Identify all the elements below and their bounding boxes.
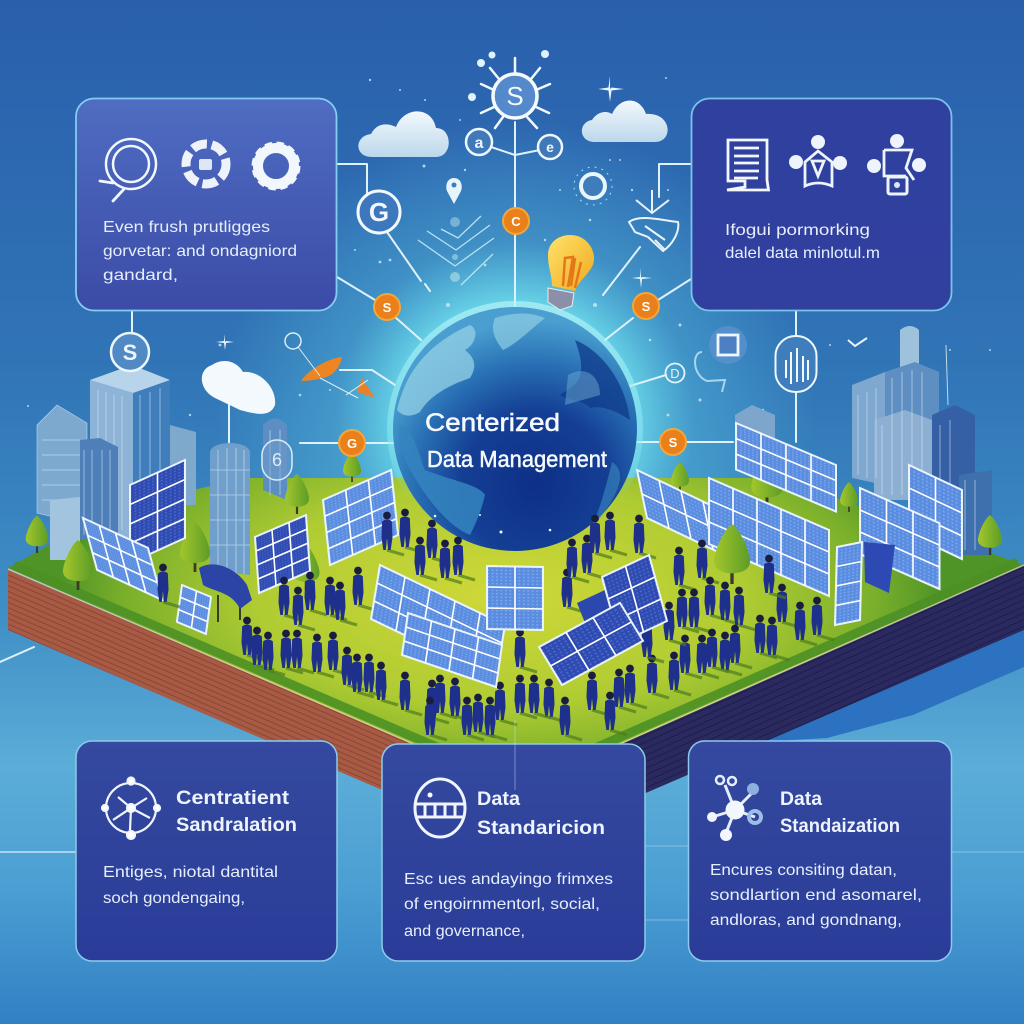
icon: D circle [666, 364, 684, 382]
globe title: Centerized [425, 409, 560, 437]
text: panel body: soch gondengaing, [103, 890, 245, 907]
heading [477, 789, 605, 839]
solar panels: front [371, 524, 750, 687]
land side: brick [8, 570, 518, 848]
heading [176, 788, 297, 836]
text: panel body: and governance, [404, 923, 525, 940]
text: panel body: sondlartion end asomarel, [710, 887, 922, 904]
panel: bottom centre [382, 720, 645, 961]
orange nodes: G [347, 436, 357, 451]
text: panel body: dalel data minlotul.m [725, 245, 880, 262]
icon: location pin and chevrons [418, 178, 494, 285]
text: panel body [725, 222, 880, 262]
icon: glowing ring [574, 167, 612, 205]
heading: Data [477, 789, 520, 810]
text: panel body [103, 219, 297, 284]
text: panel body [710, 862, 922, 929]
globe continents [397, 314, 630, 535]
icon: small eye circle [538, 135, 562, 159]
text: panel body: Ifogui pormorking [725, 222, 870, 239]
icon: sun with S [468, 50, 550, 128]
icon: document [727, 140, 768, 190]
panel: top right [692, 98, 952, 310]
icon: orange kite [285, 333, 375, 398]
buildings right [735, 326, 992, 555]
text: panel body: andloras, and gondnang, [710, 912, 902, 929]
orange nodes: O [700, 263, 710, 278]
heading: Standaricion [477, 818, 605, 839]
globe title: Data Management [427, 446, 608, 472]
icon: cloud centre-left [202, 361, 275, 414]
heading: Centratient [176, 788, 290, 809]
icon: small eye circle: e [546, 139, 554, 155]
orange nodes: S [642, 299, 651, 314]
orange nodes: S [383, 300, 392, 315]
icon: building S badge [111, 333, 149, 371]
orange nodes: S [669, 435, 678, 450]
icon: compass network [102, 778, 160, 839]
text: panel body: Even frush prutligges [103, 219, 270, 236]
icon: small A circle: a [475, 135, 484, 152]
heading [780, 789, 900, 837]
people [157, 509, 834, 740]
icon: people house [789, 135, 847, 186]
land side: dark [518, 565, 1024, 848]
text: panel body: gandard, [103, 267, 178, 284]
globe stars [434, 514, 551, 534]
panel: bottom right [688, 741, 952, 961]
icon: oval gauge [415, 779, 465, 837]
text: panel body [103, 864, 278, 907]
text: panel body [404, 871, 613, 940]
icon: knot [629, 190, 678, 251]
orange nodes: C [511, 214, 521, 229]
heading: Sandralation [176, 815, 297, 836]
icon: D circle: D [670, 366, 680, 381]
text: panel body: Entiges, niotal dantital [103, 864, 278, 881]
icon: check mark [848, 338, 867, 346]
solar panel: dark tilted right [864, 542, 895, 593]
icon: molecule [707, 776, 761, 841]
icon: capsule badge left [262, 440, 292, 480]
icon: light bulb [548, 235, 594, 310]
icon: org chart [867, 134, 926, 194]
buildings left [37, 365, 287, 575]
panel: bottom left [76, 741, 337, 961]
orange nodes: A [318, 263, 328, 278]
icon: G circle: G [369, 197, 389, 227]
icon: cloud right [582, 100, 668, 142]
icon: cloud left [358, 111, 449, 157]
icon: small A circle [466, 129, 492, 155]
icon: capsule chart [776, 336, 816, 392]
icon: sun with S: S [506, 81, 524, 111]
icon: segmented ring [186, 144, 226, 184]
solar panel: dark curved dish [199, 564, 252, 622]
text: panel body: Esc ues andayingo frimxes [404, 871, 613, 888]
icon: square in circle [695, 326, 747, 392]
icon: magnifier [100, 139, 156, 201]
sparkles [216, 76, 652, 350]
text: panel body: Encures consiting datan, [710, 862, 897, 879]
text: panel body: of engoirnmentorl, social, [404, 896, 600, 913]
trees back [26, 452, 1002, 590]
connector lines, upper area [0, 122, 1024, 920]
icon: G circle [358, 191, 400, 233]
land shadow [647, 630, 1024, 792]
icon: capsule badge left: 6 [272, 450, 282, 470]
heading: Standaization [780, 816, 900, 837]
panel: top left [76, 98, 336, 310]
globe title [425, 409, 608, 472]
background stars [27, 77, 991, 421]
globe [387, 301, 643, 557]
icon: gear [254, 144, 298, 188]
solar panels: back rows [83, 423, 962, 634]
text: panel body: gorvetar: and ondagniord [103, 243, 297, 260]
orange nodes [310, 208, 718, 456]
land top: grass [8, 478, 1024, 790]
heading: Data [780, 789, 822, 810]
land block [8, 478, 1024, 848]
icon: building S badge: S [123, 340, 137, 365]
